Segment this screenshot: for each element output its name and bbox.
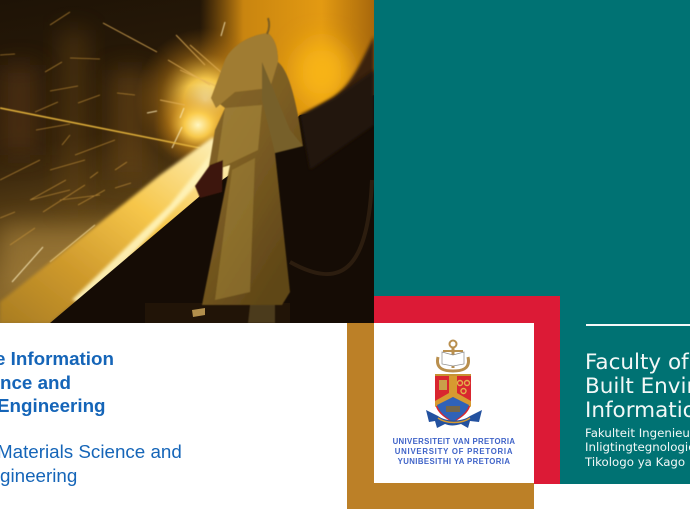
- icon: university crest: [426, 340, 482, 428]
- text: university name in three languages: YUNIBESITHI YA PRETORIA: [398, 457, 510, 466]
- teal faculty panel: [374, 0, 690, 484]
- faculty name in Afrikaans and Sepedi: [584, 426, 690, 469]
- white rule above faculty name: [586, 324, 690, 326]
- text: university name in three languages: UNIVERSITEIT VAN PRETORIA: [393, 437, 515, 446]
- sparks: [0, 12, 135, 245]
- photo: steelworker beside molten metal: [0, 0, 374, 323]
- heading: school and department: nce and: [0, 372, 71, 392]
- faculty name in English: [585, 350, 690, 423]
- red frame square: [374, 296, 560, 484]
- heading: school and department: Engineering: [0, 395, 106, 416]
- heading: school and department: [0, 348, 114, 416]
- worker in protective suit: [195, 18, 303, 323]
- text: university name in three languages: [393, 437, 515, 466]
- University of Pretoria logo panel: [374, 323, 534, 483]
- dark corner at top right: [300, 36, 374, 130]
- subheading: department of materials science: gineering: [0, 464, 77, 486]
- dark machinery: [50, 95, 374, 323]
- subheading: department of materials science: Materials Science and: [0, 441, 182, 462]
- subheading: department of materials science: [0, 441, 182, 486]
- molten metal stream: [0, 137, 240, 323]
- spark streak across the furnace: [0, 108, 200, 148]
- gold frame square: [347, 323, 534, 509]
- text: university name in three languages: UNIVERSITY OF PRETORIA: [395, 447, 513, 456]
